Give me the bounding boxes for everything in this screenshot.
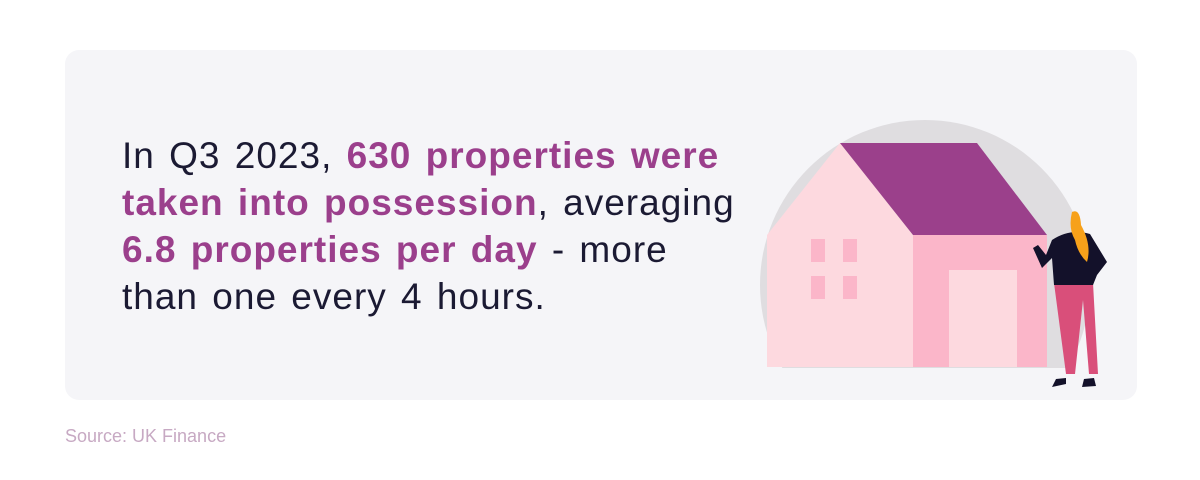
icon: woman <box>1033 211 1107 387</box>
icon: house <box>767 143 1047 367</box>
illustration: house and woman <box>760 120 1107 387</box>
text block: statistic: taken into possession, averaging <box>122 182 735 223</box>
panel: card <box>65 50 1137 400</box>
text block: statistic: than one every 4 hours. <box>122 276 546 317</box>
source note: Source: UK Finance <box>65 426 226 446</box>
background circle <box>760 120 1085 368</box>
text block: statistic: In Q3 2023, 630 properties were <box>122 135 719 176</box>
text block: statistic <box>122 135 735 317</box>
text block: statistic: 6.8 properties per day - more <box>122 229 668 270</box>
